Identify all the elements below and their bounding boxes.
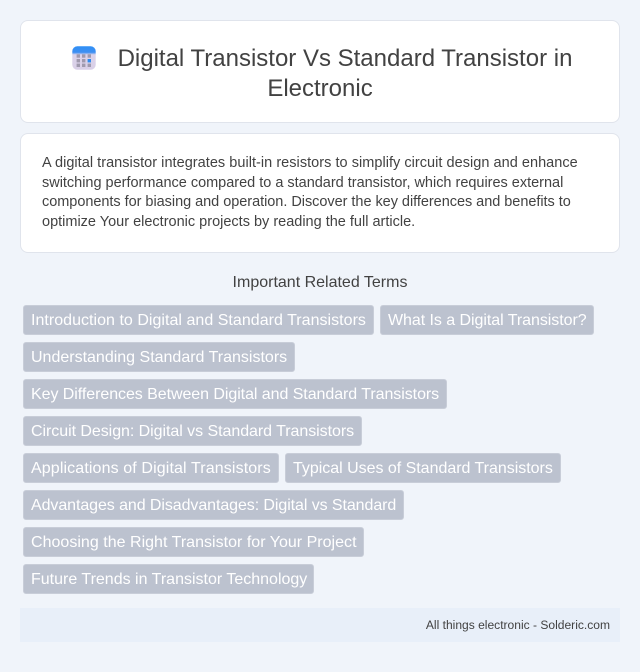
title (118, 45, 572, 102)
summary text: switching performance compared to a standard transistor, which requires external (42, 174, 563, 190)
tag (23, 564, 314, 594)
tag (380, 305, 594, 335)
tag (23, 416, 362, 446)
tag: Introduction to Digital and Standard Transistors (31, 312, 366, 329)
summary text: components for biasing and operation. Discover the key differences and benefits to (42, 194, 571, 210)
footer bar (20, 608, 620, 642)
tag: Circuit Design: Digital vs Standard Transistors (31, 423, 354, 440)
tag list (23, 305, 594, 594)
tag (23, 490, 404, 520)
footer text: All things electronic - Solderic.com (426, 618, 610, 632)
panel: title header (20, 20, 620, 123)
tag: Applications of Digital Transistors (31, 460, 271, 477)
tag (23, 305, 374, 335)
tag: Key Differences Between Digital and Standard Transistors (31, 386, 439, 403)
icon: calendar grid (72, 46, 96, 70)
tag: Advantages and Disadvantages: Digital vs Standard (31, 497, 396, 514)
tag: Future Trends in Transistor Technology (31, 571, 307, 588)
summary text: A digital transistor integrates built-in resistors to simplify circuit design and enhance (42, 155, 578, 171)
tag: What Is a Digital Transistor? (388, 312, 587, 329)
summary text (42, 155, 578, 230)
heading: related terms: Important Related Terms (233, 274, 407, 291)
tag: Typical Uses of Standard Transistors (293, 460, 553, 477)
tag (23, 453, 279, 483)
tag (285, 453, 561, 483)
summary text: optimize Your electronic projects by reading the full article. (42, 214, 415, 230)
panel: summary (20, 133, 620, 253)
tag (23, 342, 295, 372)
tag (23, 379, 447, 409)
title: Electronic (267, 75, 373, 102)
tag: Choosing the Right Transistor for Your Project (31, 534, 357, 551)
tag: Understanding Standard Transistors (31, 349, 287, 366)
title: Digital Transistor Vs Standard Transistor in (118, 45, 572, 72)
tag (23, 527, 364, 557)
